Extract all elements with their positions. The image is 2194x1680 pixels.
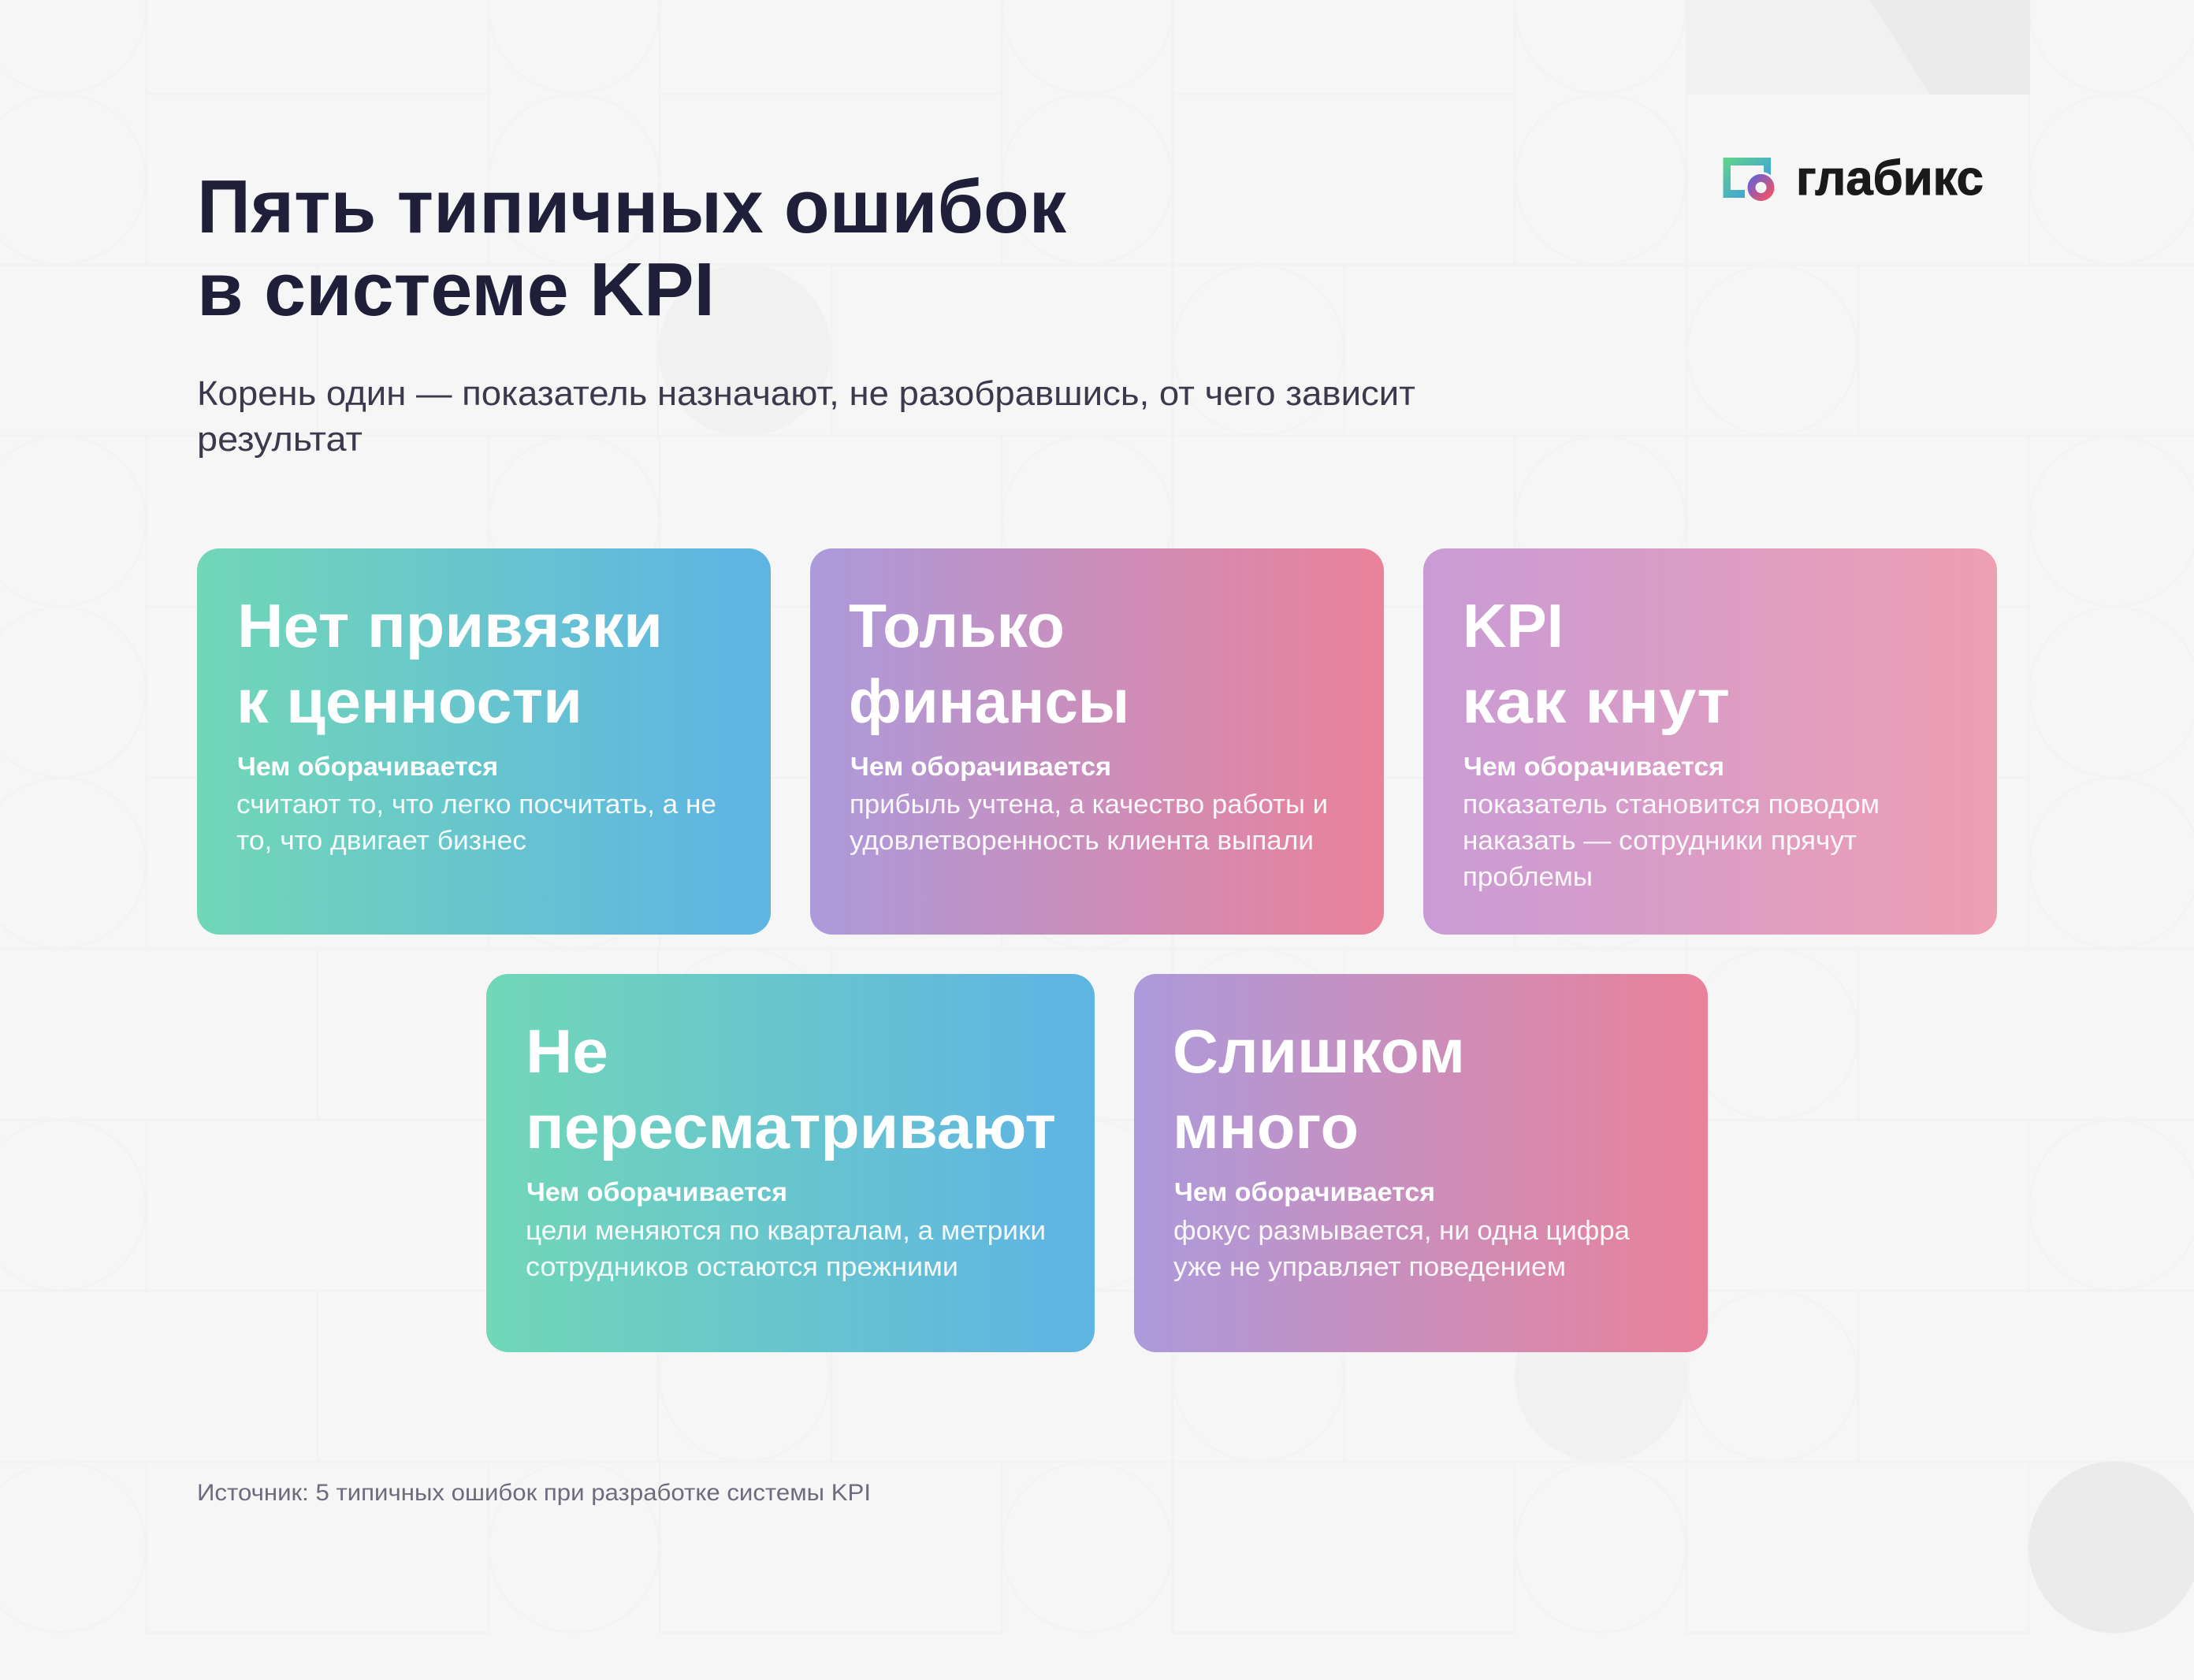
- panel: только финансы: [810, 548, 1384, 935]
- card body: [236, 790, 716, 856]
- title: в системе KPI: [197, 247, 715, 332]
- card body: уже не управляет поведением: [1173, 1252, 1566, 1282]
- card background: [197, 548, 771, 935]
- card body: то, что двигает бизнес: [236, 826, 526, 856]
- card heading: Только: [849, 591, 1065, 660]
- card body: фокус размывается, ни одна цифра: [1173, 1216, 1630, 1246]
- card body: показатель становится поводом: [1463, 790, 1880, 820]
- source note: Источник: 5 типичных ошибок при разработке системы KPI: [197, 1480, 871, 1506]
- card body: прибыль учтена, а качество работы и: [850, 790, 1328, 820]
- panel: не пересматривают: [486, 974, 1095, 1352]
- card heading: [236, 591, 663, 736]
- panel: нет привязки к ценности: [197, 548, 771, 935]
- subtitle: результат: [197, 420, 363, 459]
- card background: [486, 974, 1095, 1352]
- logo wordmark: глабикс: [1796, 151, 1984, 206]
- card label: Чем оборачивается: [850, 752, 1111, 781]
- subtitle: Корень один — показатель назначают, не разобравшись, от чего зависит: [197, 374, 1415, 413]
- card body: [1463, 790, 1880, 892]
- card heading: Нет привязки: [237, 591, 663, 660]
- card heading: [526, 1017, 1056, 1162]
- card body: [526, 1216, 1046, 1282]
- card body: сотрудников остаются прежними: [526, 1252, 958, 1282]
- card body: [1173, 1216, 1630, 1282]
- card label: Чем оборачивается: [1174, 1177, 1435, 1206]
- icon: logo mark: [1723, 158, 1776, 203]
- card background: [1134, 974, 1708, 1352]
- card label: Чем оборачивается: [1463, 752, 1724, 781]
- subtitle: [197, 374, 1415, 459]
- panel: слишком много: [1134, 974, 1708, 1352]
- card heading: как кнут: [1462, 667, 1730, 736]
- card heading: [849, 591, 1129, 736]
- card heading: KPI: [1463, 591, 1564, 660]
- panel: KPI как кнут: [1423, 548, 1997, 935]
- logo: [1723, 151, 1984, 206]
- card body: считают то, что легко посчитать, а не: [236, 790, 716, 820]
- card label: Чем оборачивается: [237, 752, 498, 781]
- card heading: к ценности: [236, 667, 582, 736]
- card heading: [1462, 591, 1730, 736]
- card body: [850, 790, 1328, 856]
- card heading: [1173, 1017, 1465, 1162]
- card body: наказать — сотрудники прячут: [1463, 826, 1857, 856]
- card body: удовлетворенность клиента выпали: [850, 826, 1314, 856]
- card background: [1423, 548, 1997, 935]
- title: [197, 165, 1067, 332]
- card label: Чем оборачивается: [526, 1177, 787, 1206]
- card heading: Не: [526, 1017, 608, 1086]
- card background: [810, 548, 1384, 935]
- card heading: много: [1173, 1092, 1359, 1162]
- title: Пять типичных ошибок: [197, 165, 1067, 249]
- card heading: пересматривают: [526, 1092, 1056, 1162]
- card body: проблемы: [1463, 862, 1593, 892]
- card heading: Слишком: [1173, 1017, 1465, 1086]
- card heading: финансы: [849, 667, 1129, 736]
- card body: цели меняются по кварталам, а метрики: [526, 1216, 1046, 1246]
